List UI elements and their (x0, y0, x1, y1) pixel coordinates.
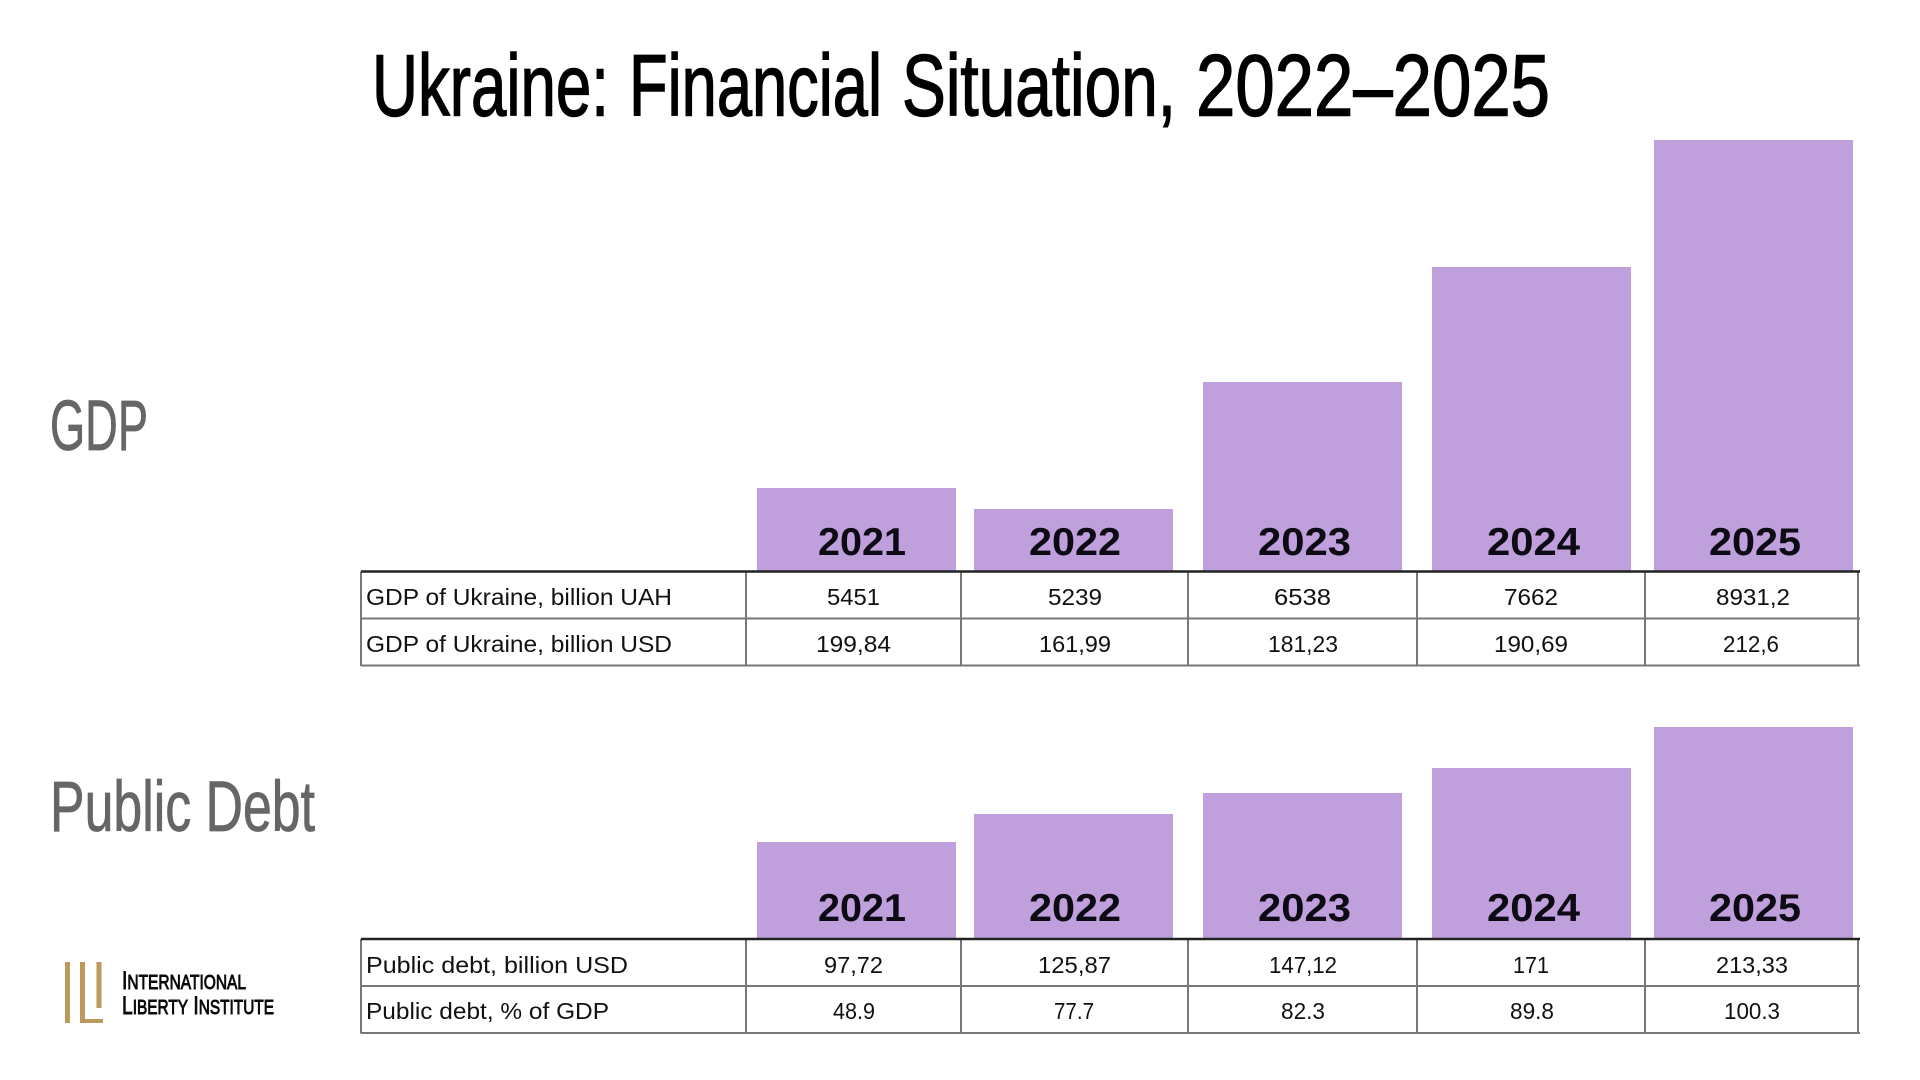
row: debt billion USD (366, 952, 1788, 978)
title: 2022–2025 (1196, 38, 1550, 134)
bar: GDP 2021 (757, 488, 956, 571)
bar: debt 2023 (1203, 793, 1402, 939)
logo: International Liberty Institute (65, 962, 274, 1023)
title: Ukraine: (372, 38, 609, 134)
bar: debt 2024: 2024 (1487, 887, 1580, 930)
row: GDP billion UAH: 5451 (827, 584, 880, 610)
row: debt percent of GDP: 48.9 (833, 998, 875, 1024)
bar: GDP 2024 (1432, 267, 1631, 571)
bar: debt 2024 (1432, 768, 1631, 939)
row: GDP billion USD: 212,6 (1723, 631, 1779, 657)
bar: GDP 2024: 2024 (1487, 521, 1580, 564)
row: debt percent of GDP (366, 998, 1780, 1024)
bar: debt 2022: 2022 (1029, 887, 1121, 930)
title: Financial (629, 38, 882, 134)
row: debt billion USD: 213,33 (1716, 952, 1788, 978)
bar: debt 2023: 2023 (1258, 887, 1351, 930)
row: debt percent of GDP: Public debt, % of GDP (366, 998, 609, 1024)
title (372, 38, 1550, 134)
row: GDP billion UAH: GDP of Ukraine, billion UAH (366, 584, 672, 610)
bar: GDP 2023 (1203, 382, 1402, 571)
title: Situation, (902, 38, 1176, 134)
bar: debt 2025: 2025 (1709, 887, 1801, 930)
row: debt billion USD: 171 (1513, 952, 1549, 978)
row: GDP billion USD: 181,23 (1268, 631, 1338, 657)
heading: Public Debt: Public Debt (50, 768, 315, 847)
heading: GDP: GDP (50, 387, 148, 466)
logo wordmark (122, 967, 274, 1020)
row: GDP billion USD: 199,84 (816, 631, 891, 657)
row: GDP billion USD: 161,99 (1039, 631, 1111, 657)
row: GDP billion UAH: 7662 (1504, 584, 1558, 610)
row: GDP billion UAH: 5239 (1048, 584, 1102, 610)
table: Public Debt (361, 939, 1860, 1034)
row: debt billion USD: 97,72 (824, 952, 883, 978)
table: GDP (361, 572, 1860, 666)
bar chart: Public Debt (757, 727, 1853, 939)
row: GDP billion USD: 190,69 (1494, 631, 1568, 657)
bar: GDP 2022 (974, 509, 1173, 571)
row: debt percent of GDP: 77.7 (1054, 998, 1094, 1024)
row: debt percent of GDP: 82.3 (1281, 998, 1325, 1024)
bar: GDP 2021: 2021 (818, 521, 906, 564)
row: GDP billion USD (366, 631, 1779, 657)
row: debt percent of GDP: 100.3 (1724, 998, 1780, 1024)
bar: debt 2021: 2021 (818, 887, 906, 930)
bar: GDP 2025 (1654, 140, 1853, 571)
row: GDP billion UAH: 8931,2 (1716, 584, 1790, 610)
row: debt percent of GDP: 89.8 (1510, 998, 1554, 1024)
row: debt billion USD: Public debt, billion USD (366, 952, 628, 978)
bar: debt 2025 (1654, 727, 1853, 939)
row: GDP billion UAH: 6538 (1274, 584, 1331, 610)
row: debt billion USD: 147,12 (1269, 952, 1337, 978)
bar: GDP 2025: 2025 (1709, 521, 1801, 564)
bar: GDP 2023: 2023 (1258, 521, 1351, 564)
bar: debt 2022 (974, 814, 1173, 939)
logo wordmark: LIBERTY INSTITUTE (122, 992, 274, 1020)
row: GDP billion UAH (366, 584, 1790, 610)
row: GDP billion USD: GDP of Ukraine, billion USD (366, 631, 672, 657)
bar: GDP 2022: 2022 (1029, 521, 1121, 564)
icon: logo mark (65, 962, 103, 1023)
row: debt billion USD: 125,87 (1038, 952, 1111, 978)
logo wordmark: INTERNATIONAL (122, 967, 246, 995)
bar chart: GDP (757, 140, 1853, 571)
bar: debt 2021 (757, 842, 956, 939)
